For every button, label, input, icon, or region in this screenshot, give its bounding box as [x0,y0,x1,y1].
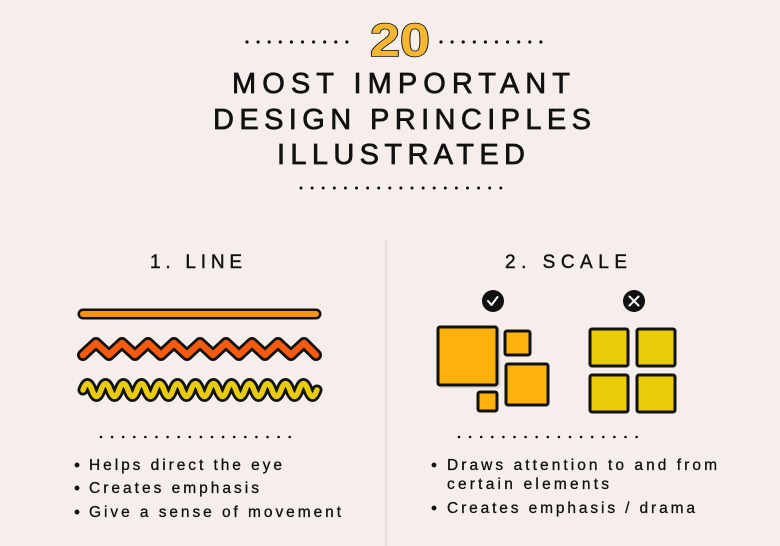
dotted separator [101,436,290,438]
bullet list: certain elements [447,476,609,493]
heading: 1. LINE: 1. LINE [150,252,242,273]
title: MOST IMPORTANT [232,68,570,100]
panel: line [75,252,342,521]
title [213,68,591,171]
dotted separator [459,436,647,438]
good scale squares [438,327,548,411]
bullet list: Give a sense of movement [89,504,342,521]
bullet list: Creates emphasis [89,480,259,497]
zigzag line [83,343,316,355]
dotted line under title [301,186,501,190]
bullet list: Helps direct the eye [89,457,282,474]
dotted line right [441,40,552,44]
title: ILLUSTRATED [277,139,525,171]
bullet list [75,457,342,521]
bullet list: Draws attention to and from [447,457,717,474]
number 20: 20 [370,14,430,66]
icon: cross [623,290,645,312]
bullet list: Creates emphasis / drama [447,500,695,517]
bullet list [432,457,717,517]
bad scale squares [590,329,675,412]
straight line [83,308,316,320]
title: DESIGN PRINCIPLES [213,104,591,136]
icon: check [482,290,504,312]
wavy line [83,384,317,396]
divider [385,240,387,546]
panel: scale [432,252,717,517]
dotted line left [247,40,358,44]
heading: 2. SCALE: 2. SCALE [505,252,627,273]
